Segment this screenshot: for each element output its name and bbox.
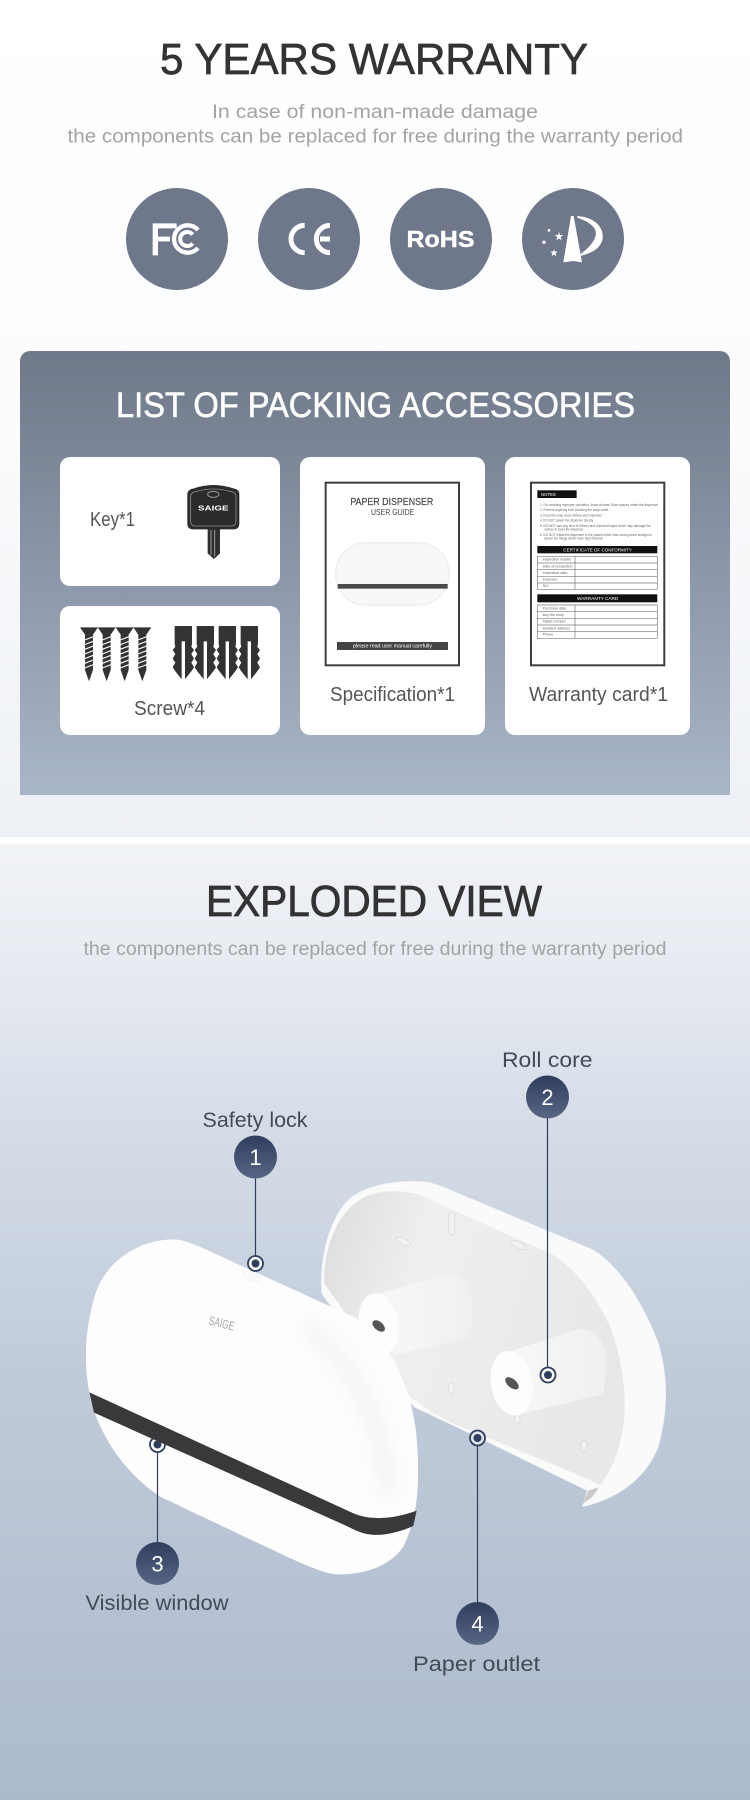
warranty document: above the things which have high infection <box>544 537 603 541</box>
icon: key <box>187 485 239 559</box>
warranty document: Tablet number <box>543 620 567 624</box>
right bevel shading <box>310 1330 388 1490</box>
panel heading: LIST OF PACKING ACCESSORIES <box>116 386 635 425</box>
icon: wall anchors <box>173 626 260 679</box>
exploded view section background <box>0 844 750 1800</box>
warranty document: CERTIFICATE OF CONFORMITY <box>563 547 632 552</box>
icon: key: SAIGE <box>198 505 229 512</box>
lock button <box>242 1270 262 1284</box>
callout 2: roll core <box>502 1049 592 1382</box>
top section background <box>0 0 750 837</box>
warranty document: 1. For avoiding improper operation, leave at least 10cm spaces under the dispenser <box>540 503 659 507</box>
warranty document: Inspector <box>543 577 558 581</box>
user guide document: PAPER DISPENSER <box>350 497 433 508</box>
warranty document: 2. Prevent anything from blocking the soap outlet <box>540 508 608 512</box>
visible window band <box>89 1392 417 1535</box>
card: warranty <box>505 457 690 735</box>
callout 3: visible window: 3 <box>151 1552 164 1576</box>
divider band <box>0 837 750 844</box>
icon: screws <box>80 627 151 681</box>
callout 4: paper outlet <box>413 1430 540 1676</box>
warranty document: Inspection results <box>543 558 571 562</box>
heading: exploded view: EXPLODED VIEW <box>206 877 542 926</box>
warranty document: Purchase date <box>543 606 566 610</box>
roll core right <box>486 1329 607 1419</box>
user guide document: USER GUIDE <box>371 508 414 517</box>
warranty document: 5. DO NOT use any kind of thinner and chemical liquid which may damage the <box>540 524 651 528</box>
card: specification <box>300 457 485 735</box>
warranty document: NO. <box>543 584 549 588</box>
user guide document: please read user manual carefully <box>353 643 432 649</box>
warranty label: Warranty card*1 <box>529 684 668 706</box>
warranty document: 6. DO NOT install the dispenser in the places which have strong direct sunlight or <box>540 533 653 537</box>
label: safety lock: Safety lock <box>202 1109 308 1132</box>
mounting slots <box>395 1213 587 1451</box>
icon: FC certification <box>126 188 228 290</box>
label: visible window: Visible window <box>86 1592 229 1615</box>
warranty document: Buy the shop <box>543 613 564 617</box>
warranty document: 3. Keep the soap clean without any impurities <box>540 513 602 517</box>
warranty document: surface to clean the dispenser <box>544 528 584 532</box>
warranty document: Date of production <box>543 564 573 568</box>
icon: CE certification <box>258 188 360 290</box>
title: 5 years warranty: 5 YEARS WARRANTY <box>160 35 588 84</box>
warranty document: Inspection date <box>543 571 567 575</box>
front cover of dispenser <box>86 1239 418 1574</box>
icon: road and stars certification <box>522 188 624 290</box>
subtitle text: In case of non-man-made damage <box>212 102 538 123</box>
icon: RoHS certification: RoHS <box>406 226 474 252</box>
card: screws <box>60 606 280 735</box>
roll core left <box>354 1273 472 1358</box>
callout 4: paper outlet: 4 <box>471 1612 484 1636</box>
callout 1: safety lock: 1 <box>249 1145 262 1170</box>
callout 3 marker and leader <box>150 1437 165 1545</box>
key label: Key*1 <box>90 509 135 531</box>
panel: list of packing accessories <box>20 351 730 795</box>
callout 3: visible window <box>86 1542 229 1615</box>
warranty document <box>531 483 664 665</box>
warranty document: Detailed address <box>543 626 570 630</box>
outlet lip <box>583 1487 599 1503</box>
warranty document: WARRANTY CARD <box>577 596 618 601</box>
screw label: Screw*4 <box>134 698 205 720</box>
callout 2: roll core: 2 <box>541 1085 554 1110</box>
card: key <box>60 457 280 586</box>
exploded view subtitle: the components can be replaced for free during the warranty period <box>84 939 666 960</box>
user guide document <box>326 483 459 665</box>
subtitle text: the components can be replaced for free during the warranty period <box>68 126 683 148</box>
cover logo: SAIGE <box>207 1314 236 1334</box>
warranty document: 4. DO NOT splash the dispenser directly <box>540 519 593 523</box>
specification label: Specification*1 <box>330 684 455 706</box>
callout 1: safety lock <box>202 1109 308 1271</box>
back shell of dispenser <box>321 1181 666 1507</box>
label: paper outlet: Paper outlet <box>413 1653 540 1676</box>
inner cavity <box>324 1191 625 1485</box>
label: roll core: Roll core <box>502 1049 592 1072</box>
icon: RoHS certification <box>390 188 492 290</box>
subtitle text <box>68 102 683 148</box>
warranty document: NOTES <box>541 492 556 497</box>
warranty document: Phone <box>543 633 553 637</box>
